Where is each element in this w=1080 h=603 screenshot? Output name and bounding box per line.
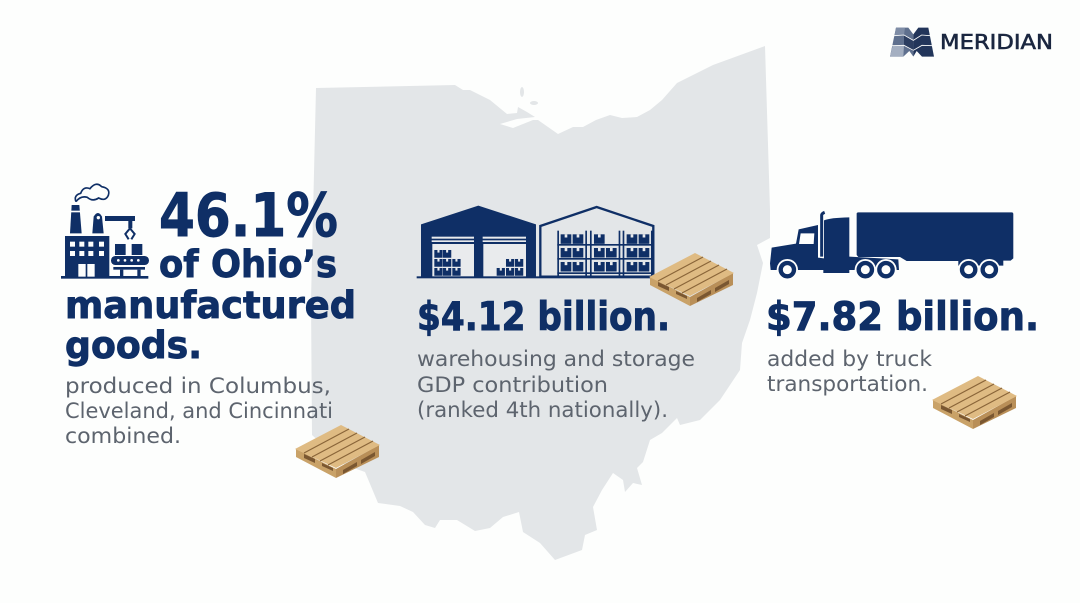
- icon: wooden pallet left: [295, 425, 380, 478]
- body text: added by truck: [767, 347, 933, 396]
- icon: wooden pallet center: [649, 253, 734, 306]
- body text: produced in cities: produced in Columbus,: [65, 374, 331, 398]
- body text: produced in cities: combined.: [65, 424, 181, 448]
- heading: 46.1% of Ohio's manufactured goods.: goods.: [65, 324, 202, 367]
- heading: 46.1% of Ohio's manufactured goods.: manufactured: [65, 284, 356, 327]
- icon: Meridian mark: [890, 28, 934, 57]
- panel: truck transportation: [766, 212, 1039, 396]
- body text: warehousing GDP: (ranked 4th nationally).: [417, 398, 668, 422]
- icon: semi truck: [770, 212, 1013, 280]
- body text: warehousing GDP: GDP contribution: [417, 373, 608, 397]
- body text: added by truck: transportation.: [767, 372, 928, 396]
- body text: warehousing GDP: warehousing and storage: [417, 347, 695, 371]
- logo: Meridian: [890, 28, 1053, 57]
- heading: $7.82 billion.: $7.82 billion.: [766, 295, 1039, 340]
- icon: factory: [61, 184, 149, 279]
- map: Ohio silhouette: [311, 46, 770, 560]
- heading: 46.1% of Ohio's manufactured goods.: [65, 181, 356, 367]
- panel: warehousing: [417, 206, 695, 422]
- icon: warehouses: [417, 206, 654, 278]
- heading: 46.1% of Ohio's manufactured goods.: of Ohio’s: [159, 243, 337, 286]
- body text: produced in cities: Cleveland, and Cincinnati: [65, 399, 333, 423]
- body text: warehousing GDP: [417, 347, 695, 422]
- heading: 46.1% of Ohio's manufactured goods.: 46.1%: [159, 181, 338, 251]
- wordmark: MERIDIAN: [940, 30, 1053, 54]
- panel: manufactured goods: [61, 181, 356, 448]
- icon: wooden pallet right: [932, 376, 1017, 429]
- heading: $4.12 billion.: $4.12 billion.: [417, 295, 670, 340]
- body text: produced in cities: [65, 374, 333, 448]
- body text: added by truck: added by truck: [767, 347, 933, 371]
